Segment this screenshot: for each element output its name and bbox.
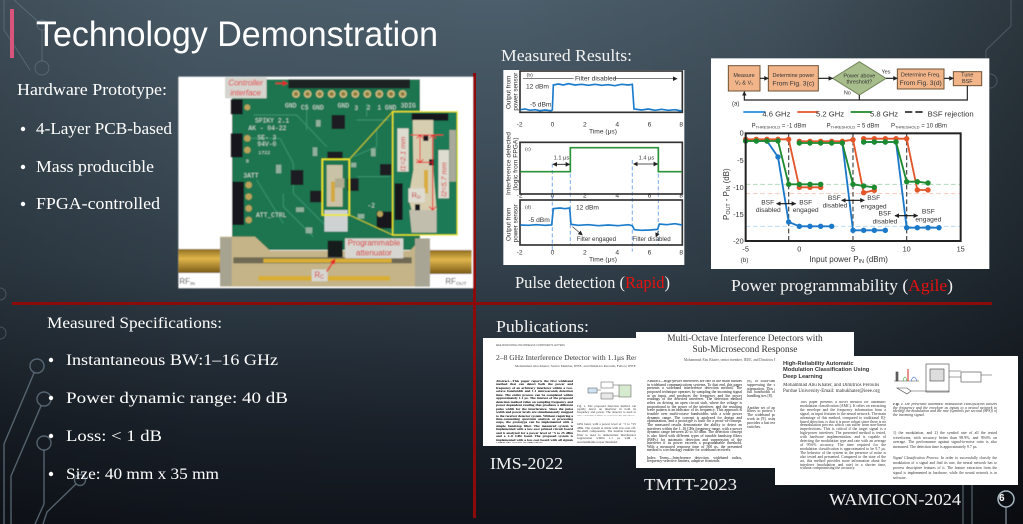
legend: 5.2 GHz bbox=[816, 109, 844, 118]
heading: publications: Publications: bbox=[496, 317, 589, 336]
subplot c: 2 bbox=[583, 193, 587, 200]
axes text: IN bbox=[859, 259, 864, 265]
plot bbox=[722, 129, 965, 265]
WAMICON title: High-Reliability Automatic bbox=[783, 361, 854, 367]
axes text: 0 bbox=[797, 244, 801, 253]
subplot d: 6 bbox=[648, 249, 652, 256]
panel: hardware prototype list bbox=[17, 80, 173, 213]
callout: controller interface bbox=[225, 77, 287, 98]
flowchart: Power above bbox=[843, 73, 875, 79]
subplot d bbox=[506, 200, 683, 264]
subplot c: 4 bbox=[615, 193, 619, 200]
paper: TMTT-2023 bbox=[636, 332, 854, 468]
silkscreen labels: GND bbox=[338, 102, 349, 109]
annotations bbox=[756, 195, 942, 226]
WAMICON paragraph 1: 1) the modulation, and 2) the symbol rate of all the tested waveforms, with accuracy better than 98.9%, and 99.6% on average. The performance against signal-to-noise ratio is also measured. The detection time is approximately 9.7 μs. bbox=[893, 431, 997, 449]
callout: Rc bbox=[312, 259, 335, 281]
heading: measured specifications: Measured Specifications: bbox=[47, 315, 222, 332]
silkscreen labels: 3ATT bbox=[243, 173, 259, 180]
TMTT abstract: Index Terms—Interference detection, wideband radios, frequency-selective limiters, adaptive frontends. bbox=[647, 456, 742, 463]
axes text: -15 bbox=[733, 210, 744, 219]
subplot c: 1.4 μs bbox=[639, 156, 654, 162]
IMS figure bbox=[588, 382, 632, 400]
callout: controller interface: Controller bbox=[228, 79, 263, 88]
subplot b: 6 bbox=[648, 121, 652, 128]
threshold labels: P bbox=[827, 123, 831, 129]
subplot b: 0 bbox=[551, 121, 555, 128]
panel: measured specifications bbox=[47, 315, 288, 483]
panel: PCB photo bbox=[178, 77, 473, 288]
annotations: BSF bbox=[867, 195, 880, 202]
axes text: -20 bbox=[733, 237, 744, 246]
axes text: IN bbox=[726, 186, 732, 191]
IMS authors: Mohammad Abu Khater, Senior Member, IEEE, and Dimitrios Peroulis, Fellow, IEEE bbox=[515, 364, 636, 368]
inset photo with dimensions: R bbox=[412, 191, 417, 200]
threshold labels: P bbox=[752, 123, 756, 129]
WAMICON title: Deep Learning bbox=[783, 374, 823, 380]
silkscreen labels: SPIKY 2.1 bbox=[255, 118, 289, 125]
threshold labels: THRESHOLD bbox=[756, 124, 780, 129]
subplot b: -5 dBm bbox=[530, 101, 552, 108]
subplot c: -2 bbox=[517, 193, 523, 200]
subplot d: 8 bbox=[679, 249, 683, 256]
silkscreen labels: 94V-0 bbox=[257, 141, 277, 148]
subplot c: 1.1 μs bbox=[554, 156, 569, 162]
axes text: 0 bbox=[740, 129, 744, 138]
annotations: BSF bbox=[761, 199, 774, 206]
silkscreen labels: B bbox=[246, 158, 249, 164]
bullet: FPGA: FPGA-controlled bbox=[36, 194, 161, 213]
bullet: mass producible: Mass producible bbox=[36, 157, 154, 176]
callout: programmable attenuator bbox=[345, 238, 403, 258]
silkscreen labels: AK - 04-22 bbox=[248, 125, 287, 132]
TMTT abstract: Abstract—High-power interferers are one of the main hurdles in wideband communications systems. To that end, this paper presents a wideband interference detection method. The proposed technique operates by sampling the incoming signal at an input, and produces the frequency and the power readings of the detected interferer. The detection method relies on driving an open circuit stub, where the voltage is proportional to the power of the interferer, and the resulting wave pattern is an indicator of its frequency. This approach is feasible over multi-octave bandwidths with a wide power dynamic range. The concept is analyzed for design and optimization, and a prototype is built for a proof-of-concept. The measured results demonstrate the ability to detect an interferer within the 1–16 GHz frequency range, with a power dynamic range between 20 to 30 dBm. The detection concept is also fitted with different types of tunable bandstop filters (BSFs) for automatic detection and suppression of the interferer if its power exceeds a programmable threshold. With a measured response time of 500 ns, the presented method is a technology enabler for wideband receivers. bbox=[647, 380, 742, 452]
threshold labels: = 10 dBm bbox=[920, 123, 947, 129]
subplot d: power sensor bbox=[513, 204, 520, 242]
axes text: (b) bbox=[741, 257, 748, 264]
label: RF out: RF bbox=[445, 277, 456, 286]
WAMICON authors: Purdue University-Email: mabukhater@ieee.org bbox=[783, 389, 880, 394]
subplot d: -5 dBm bbox=[528, 217, 550, 224]
divider: horizontal bbox=[12, 302, 992, 305]
axes text: -5 bbox=[742, 244, 749, 253]
paper: IMS-2022 bbox=[483, 338, 636, 446]
flowchart: No bbox=[844, 90, 851, 96]
subplot b: Filter disabled bbox=[575, 76, 617, 83]
spec: loss: Loss: < 1 dB bbox=[66, 428, 162, 445]
axes text: OUT bbox=[726, 203, 732, 215]
subplot b: Time (μs) bbox=[589, 129, 617, 136]
callout: programmable attenuator: attenuator bbox=[356, 248, 392, 257]
threshold labels bbox=[752, 123, 947, 129]
flowchart: From Fig. 3(d) bbox=[900, 80, 942, 87]
bullet: 4-layer: 4-Layer PCB-based bbox=[36, 119, 173, 138]
subplot d: (d) bbox=[525, 204, 531, 210]
chart: power programmability bbox=[711, 58, 989, 269]
silkscreen labels: ATT_CTRL bbox=[256, 212, 287, 219]
subplot b: 12 dBm bbox=[526, 83, 549, 90]
subplot c: 6 bbox=[648, 193, 652, 200]
annotations: BSF bbox=[799, 199, 812, 206]
subplot d: 4 bbox=[615, 249, 619, 256]
axes text: 15 bbox=[957, 244, 965, 253]
WAMICON block diagram bbox=[894, 364, 992, 394]
components bbox=[291, 115, 391, 202]
flowchart: Determine Freq. bbox=[901, 73, 941, 79]
caption: power programmability: Power programmability ( Agile) bbox=[731, 276, 953, 295]
subplot d: 0 bbox=[551, 249, 555, 256]
inset photo with dimensions: l2=5.7 mm bbox=[439, 162, 448, 197]
TMTT title: Sub-Microsecond Response bbox=[693, 345, 797, 355]
annotations: engaged bbox=[861, 203, 887, 210]
TMTT title: Multi-Octave Interference Detectors with bbox=[667, 334, 823, 344]
annotations: BSF bbox=[828, 195, 841, 202]
silkscreen labels: GND bbox=[285, 102, 297, 109]
silkscreen labels: 1 GND bbox=[377, 104, 397, 111]
label: RF in: RF bbox=[179, 277, 190, 286]
spec: size: Size: 40 mm x 35 mm bbox=[66, 466, 220, 483]
silkscreen labels: CS GND bbox=[301, 104, 324, 111]
caption: WAMICON-2024: WAMICON-2024 bbox=[829, 490, 962, 509]
inset photo with dimensions bbox=[393, 112, 457, 235]
legend: 4.6 GHz bbox=[762, 109, 791, 118]
legend: 5.8 GHz bbox=[870, 109, 898, 118]
inset photo with dimensions: D bbox=[417, 195, 421, 201]
subplot b: power sensor bbox=[513, 73, 520, 111]
callout: Rc: C bbox=[320, 275, 324, 281]
flowchart: (a) bbox=[732, 101, 739, 107]
callout: programmable attenuator: Programmable bbox=[348, 239, 401, 248]
green board bbox=[232, 79, 420, 250]
threshold labels: = -1 dBm bbox=[780, 123, 806, 129]
callout: Rc: R bbox=[314, 271, 320, 280]
dashed time markers bbox=[552, 148, 658, 252]
flowchart: V₂ & V₁ bbox=[735, 81, 753, 87]
flowchart: Tune bbox=[961, 73, 973, 79]
subplot c: Interference detected bbox=[506, 132, 513, 195]
threshold labels: P bbox=[891, 123, 895, 129]
flowchart bbox=[728, 62, 982, 107]
spec: bandwidth: Instantaneous BW:1–16 GHz bbox=[66, 352, 278, 369]
axes text: -5 bbox=[737, 156, 744, 165]
silkscreen labels: 1722 bbox=[258, 150, 270, 156]
header connector bbox=[288, 79, 410, 88]
flowchart: BSF bbox=[962, 79, 973, 85]
TMTT second column bbox=[747, 380, 847, 429]
WAMICON title: Modulation Classification Using bbox=[783, 367, 869, 373]
subplot c: 0 bbox=[551, 193, 555, 200]
slide number bbox=[998, 491, 1014, 507]
label: RF out: OUT bbox=[456, 281, 467, 287]
subplot d: 12 dBm bbox=[576, 204, 599, 211]
silkscreen labels: SE- 3 bbox=[257, 134, 277, 141]
label: RF in: IN bbox=[190, 281, 195, 287]
subplot b: Output from bbox=[506, 76, 513, 109]
inset photo with dimensions: l1=2.1 mm bbox=[398, 137, 407, 171]
WAMICON authors bbox=[783, 383, 880, 394]
divider: vertical bbox=[473, 73, 476, 518]
subplot b: -2 bbox=[517, 121, 523, 128]
silkscreen labels: 3DIG bbox=[401, 102, 416, 109]
TMTT second column: Another set of approaches relies on band systems is the use of filters to protect the receiver while keeping the channel intact. The wideband power tive power limiter has previously been work in [9], using switches, where a high power device. This provides a fast reaction and is implemented with a pair of MEMS switches. bbox=[747, 406, 847, 429]
subplot b: 8 bbox=[679, 121, 683, 128]
WAMICON authors: Mohammad Abu Khater, and Dimitrios Peroulis bbox=[783, 383, 879, 388]
accent bar bbox=[10, 9, 14, 58]
axes text: Input power P bbox=[809, 255, 859, 264]
heading: measured results: Measured Results: bbox=[501, 46, 632, 65]
threshold labels: THRESHOLD bbox=[831, 124, 855, 129]
spec: dynamic range: Power dynamic range: 40 dB bbox=[66, 390, 288, 407]
slide number: 6 bbox=[999, 493, 1005, 504]
WAMICON abstract: This paper presents a novel method for automatic modulation classification (AMC). It relies on extracting the envelope and the frequency information from a signal, as input features to the neural network. The main advantage of this method, compared to traditional IQ-based detection, is that it is more robust since there is no demodulation process which can suffer from non-linear imperfections. This is critical if the target signal is a high-power interferer. The presented method is tested, with hardware implementation, and is capable of detecting the modulation type and rate with an average of 99.6% accuracy. The time required for the modulation classification is approximated to be 9.7 μs. The behavior of the system in the presence of noise is also tested and presented. Compared to the state of the art, this method provides more information about the interferer (modulation and rate) in a shorter time, without compromising the accuracy. bbox=[800, 401, 886, 470]
axes text bbox=[722, 129, 965, 265]
paper: WAMICON-2024 bbox=[775, 356, 1018, 485]
microstrip substrate bbox=[220, 237, 430, 287]
TMTT authors: Mohammad Abu Khater, senior member, IEEE, and Dimitrios Peroulis, fellow, IEEE bbox=[684, 358, 806, 362]
subplot b: 2 bbox=[583, 121, 587, 128]
annotations: BSF bbox=[879, 211, 891, 218]
SMA connectors bbox=[178, 249, 472, 274]
threshold labels: = 5 dBm bbox=[855, 123, 879, 129]
annotations: disabled bbox=[823, 203, 848, 210]
silkscreen labels bbox=[243, 102, 416, 219]
threshold labels: THRESHOLD bbox=[895, 124, 920, 129]
axes text: P bbox=[722, 215, 731, 220]
axes text: -10 bbox=[733, 183, 744, 192]
caption: pulse detection: Pulse detection (Rapid) bbox=[515, 273, 670, 292]
subplot d: 2 bbox=[583, 249, 587, 256]
subplot c bbox=[506, 132, 683, 200]
WAMICON title bbox=[783, 361, 869, 380]
chart: pulse detection bbox=[503, 70, 684, 265]
title: Technology Demonstration bbox=[36, 15, 438, 54]
axes text: (dB) bbox=[722, 168, 731, 186]
subplot b bbox=[506, 71, 683, 136]
subplot c: (logic from FPGA) bbox=[513, 137, 520, 191]
annotations: engaged bbox=[915, 217, 942, 224]
zoom box on filter bbox=[322, 112, 393, 235]
silkscreen labels: 2 bbox=[367, 104, 371, 111]
caption: IMS-2022: IMS-2022 bbox=[490, 454, 563, 473]
heading: hardware prototype: Hardware Prototype: bbox=[17, 80, 167, 99]
subplot d: Filter engaged bbox=[577, 236, 617, 243]
subplot d: Filter disabled bbox=[632, 236, 671, 243]
annotations: disabled bbox=[873, 219, 898, 226]
caption: TMTT-2023: TMTT-2023 bbox=[644, 475, 737, 494]
flowchart: threshold? bbox=[847, 79, 872, 85]
silkscreen labels: -2 bbox=[367, 203, 375, 210]
TMTT title bbox=[667, 334, 823, 355]
axes text: - P bbox=[722, 191, 731, 203]
IMS journal header: IEEE MICROWAVE AND WIRELESS COMPONENTS LETTERS bbox=[496, 344, 565, 347]
flowchart: Yes bbox=[882, 70, 891, 76]
annotations: engaged bbox=[793, 207, 819, 214]
subplot b: 4 bbox=[615, 121, 619, 128]
callout: controller interface: interface bbox=[230, 89, 262, 98]
subplot d: Time (μs) bbox=[589, 257, 617, 264]
flowchart: From Fig. 3(c) bbox=[772, 80, 814, 87]
flowchart: Determine power bbox=[772, 73, 814, 79]
axes text: 5 bbox=[851, 244, 855, 253]
legend bbox=[743, 109, 974, 118]
silkscreen labels: 3 bbox=[354, 105, 358, 112]
subplot d: Output from bbox=[506, 208, 513, 241]
axes text: (dBm) bbox=[864, 255, 888, 264]
axes text: 10 bbox=[903, 244, 911, 253]
legend: BSF rejection bbox=[928, 109, 974, 118]
subplot c: (c) bbox=[525, 146, 531, 152]
annotations: disabled bbox=[756, 207, 781, 214]
subplot c: 8 bbox=[679, 193, 683, 200]
annotations: BSF bbox=[922, 208, 935, 215]
WAMICON paragraph 2: Signal Classification Process: In order to successfully classify the modulation of a signal and find its rate, the neural network has to process descriptive features of it. The feature extraction from the signal is implemented in hardware, while the neural network is in software. bbox=[893, 456, 997, 480]
flowchart: Measure bbox=[733, 73, 755, 79]
subplot b: (b) bbox=[527, 72, 533, 78]
subplot d: -2 bbox=[517, 249, 523, 256]
